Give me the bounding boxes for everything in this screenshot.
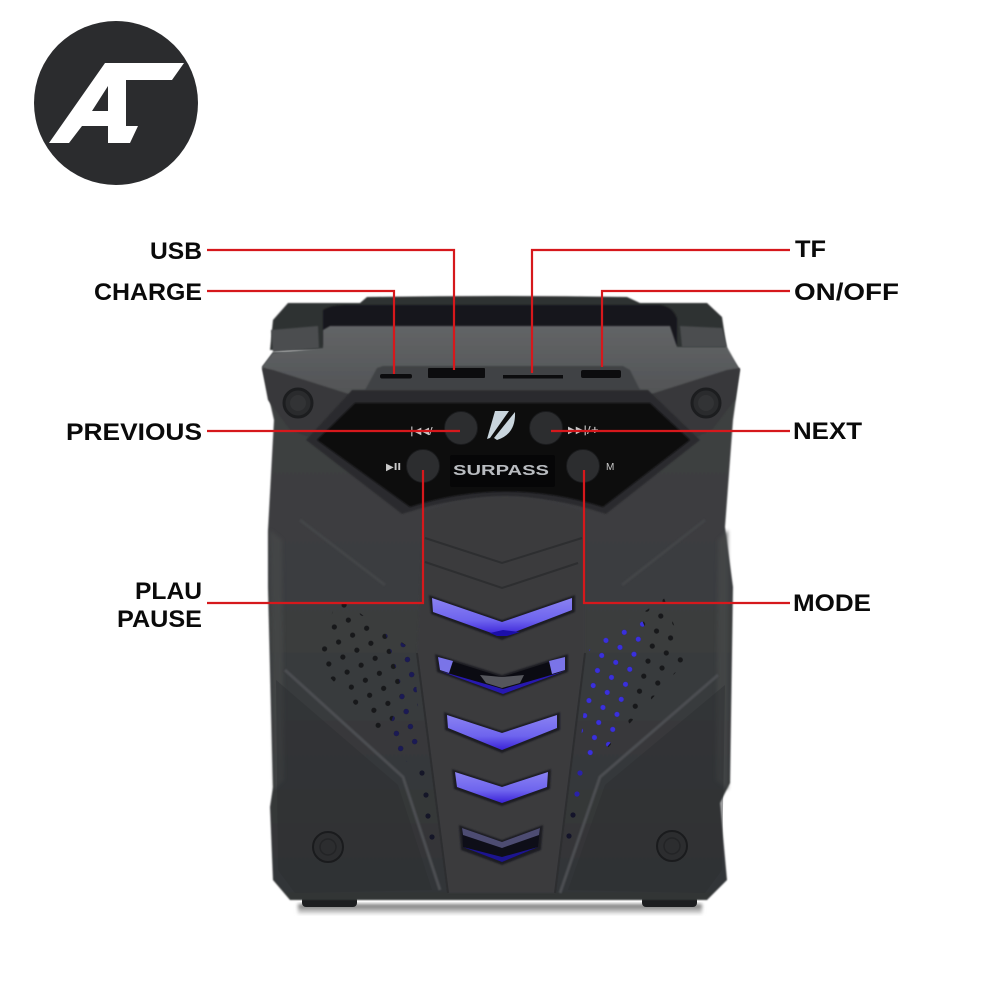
speaker grille right	[580, 598, 687, 762]
callout: MODE	[584, 470, 871, 617]
grille tail dots	[419, 770, 583, 840]
brand name: SURPASS	[453, 462, 549, 479]
ports	[380, 368, 621, 378]
chevron lights	[429, 595, 575, 865]
control panel bezel	[306, 390, 700, 514]
logo: AT circle badge	[34, 21, 198, 185]
buttons	[406, 412, 600, 482]
callout: CHARGE	[94, 279, 394, 374]
floor shadow	[298, 904, 702, 914]
callout: PREVIOUS: PREVIOUS	[66, 419, 202, 446]
side ribs	[285, 520, 718, 893]
chevron 2	[435, 654, 568, 696]
brand plate	[450, 455, 555, 487]
speaker grille left	[314, 598, 422, 762]
brand mark	[487, 411, 515, 440]
callout: PLAU PAUSE: PLAU	[135, 578, 202, 605]
handle	[270, 296, 727, 350]
top face	[262, 326, 740, 402]
column chevron lines	[417, 538, 585, 893]
callout: TF	[532, 236, 826, 373]
port ledge	[365, 366, 640, 390]
callout: ON/OFF: ON/OFF	[794, 279, 899, 306]
control panel	[317, 403, 690, 507]
callout: USB	[150, 238, 454, 370]
callout: USB: USB	[150, 238, 202, 265]
handle recess	[323, 305, 677, 345]
chevron 3	[444, 712, 560, 753]
callout: NEXT: NEXT	[793, 418, 862, 445]
handle side blocks	[271, 326, 727, 352]
side facets and bolts	[262, 368, 740, 440]
callout: ON/OFF	[602, 279, 899, 367]
lower side panels	[276, 680, 725, 893]
chevron 5	[459, 825, 543, 865]
callout: TF: TF	[795, 236, 826, 263]
bottom bolts	[313, 831, 687, 862]
speaker feet	[302, 896, 697, 907]
button symbols: M	[606, 462, 614, 473]
button symbols	[386, 425, 614, 473]
speaker product	[262, 296, 740, 914]
body side bevels	[270, 530, 728, 790]
chevron 4	[452, 769, 551, 806]
callout: PLAU PAUSE	[117, 470, 423, 633]
callout: CHARGE: CHARGE	[94, 279, 202, 306]
callout: PLAU PAUSE: PAUSE	[117, 606, 202, 633]
button symbols: |◀◀/-	[410, 426, 437, 437]
button symbols: ▶▶|/+	[568, 425, 599, 436]
button symbols: ▶II	[386, 462, 401, 473]
speaker body	[262, 352, 740, 900]
chevron 1	[429, 595, 575, 640]
callout: MODE: MODE	[793, 590, 871, 617]
front centre column	[417, 496, 585, 893]
